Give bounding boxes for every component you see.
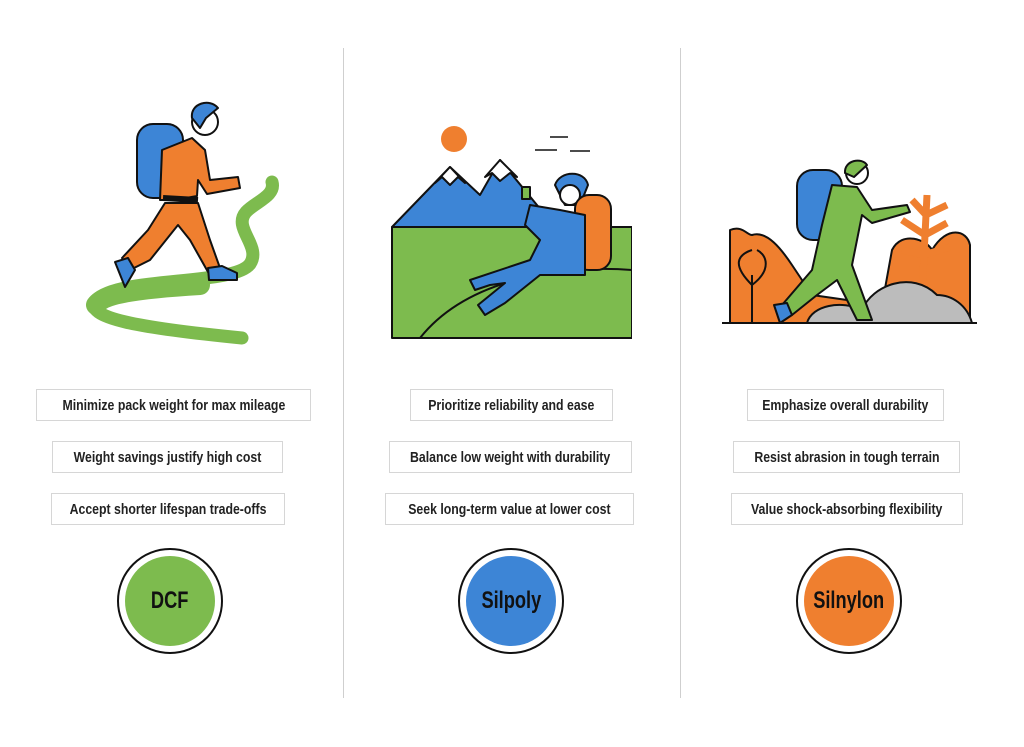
- text: Accept shorter lifespan trade-offs: [70, 500, 266, 518]
- label: Silnylon: [796, 548, 902, 654]
- label: Silpoly: [458, 548, 564, 654]
- label: DCF: [117, 548, 223, 654]
- label: Silpoly: Silpoly: [481, 587, 541, 614]
- label: Silnylon: Silnylon: [814, 587, 884, 614]
- text: Resist abrasion in tough terrain: [754, 448, 939, 466]
- text: Minimize pack weight for max mileage: [62, 396, 285, 414]
- label: DCF: DCF: [151, 587, 189, 614]
- text: Value shock-absorbing flexibility: [751, 500, 943, 518]
- column 3 text boxes: [731, 389, 963, 525]
- illustration: hiker in autumn plants: [722, 160, 977, 324]
- text: Balance low weight with durability: [410, 448, 611, 466]
- column 2 text boxes: [385, 389, 634, 525]
- column 1 text boxes: [36, 389, 311, 525]
- text: Prioritize reliability and ease: [428, 396, 595, 414]
- text: Weight savings justify high cost: [74, 448, 261, 466]
- text: Seek long-term value at lower cost: [408, 500, 611, 518]
- text: Emphasize overall durability: [762, 396, 929, 414]
- illustration: hiker on winding path: [86, 102, 279, 344]
- illustration: hiker resting with mountains: [391, 126, 632, 339]
